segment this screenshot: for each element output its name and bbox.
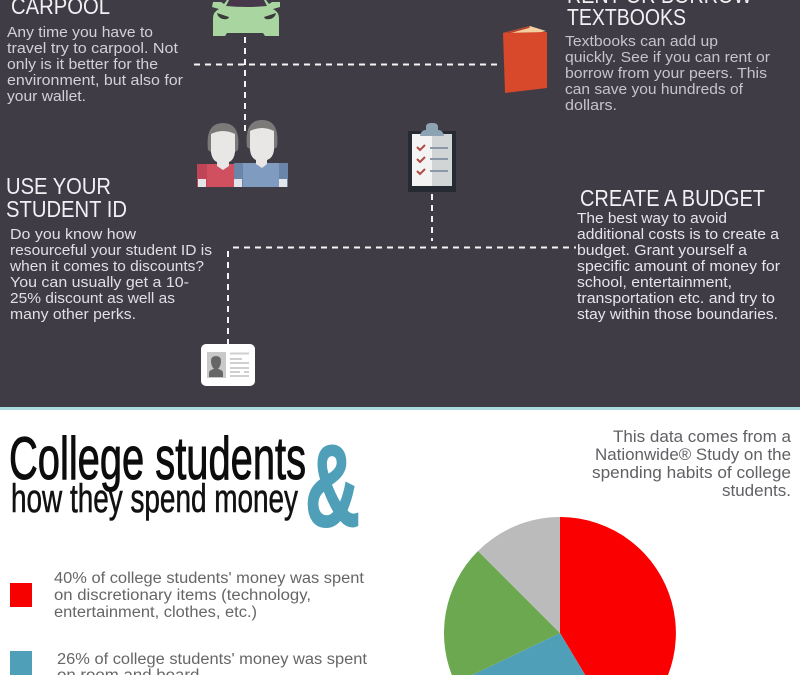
text: budget body: transportation etc. and try to [577,290,775,307]
text: student id body: when it comes to discounts? [9,258,204,275]
text: student id body: resourceful your student ID is [10,242,212,259]
text: data source note: students. [722,481,791,500]
text: data source note: This data comes from a [613,427,792,446]
text: student id body [9,226,212,323]
text: carpool body: travel try to carpool. Not [7,40,179,57]
heading: create a budget: CREATE A BUDGET [580,185,765,211]
legend: discretionary text: entertainment, clothes, etc.) [54,604,257,621]
legend: room and board text: 26% of college students' money was spent [57,651,368,668]
legend: discretionary text: on discretionary items (technology, [54,587,311,604]
text: student id body: 25% discount as well as [10,290,175,307]
text: carpool body: your wallet. [7,88,86,105]
pie chart [444,517,676,675]
legend: red swatch [10,583,32,607]
heading: rent or borrow textbooks [567,0,752,30]
connector: budget vertical dashed line [431,194,433,241]
text: textbooks body: dollars. [565,97,617,114]
heading: use your student id: USE YOUR [6,173,111,199]
text: student id body: Do you know how [10,226,136,243]
text: textbooks body [565,33,770,114]
text: budget body: The best way to avoid [577,210,727,227]
text: textbooks body: borrow from your peers. This [565,65,767,82]
text: student id body: You can usually get a 10- [10,274,189,291]
icon: student id card [201,344,255,386]
text: budget body: school, entertainment, [577,274,732,291]
subtitle: how they spend money: how they spend money [11,477,298,521]
heading: rent or borrow textbooks: TEXTBOOKS [567,4,686,30]
panel: dark tips background [0,0,800,407]
legend: discretionary text [54,570,365,621]
text: carpool body [7,24,183,105]
icon: two students [197,120,288,187]
text: data source note: spending habits of college [592,463,791,482]
connector: carpool vertical dashed line [244,37,246,131]
legend: room and board text [57,651,368,675]
text: student id body: many other perks. [10,306,136,323]
text: textbooks body: quickly. See if you can rent or [565,49,770,66]
text: textbooks body: can save you hundreds of [565,81,744,98]
legend: teal swatch [10,651,32,675]
legend: discretionary text: 40% of college students' money was spent [54,570,365,587]
text: data source note [592,427,792,500]
heading: use your student id: STUDENT ID [6,196,127,222]
text: budget body: additional costs is to create a [577,226,780,243]
title: College students: College students [9,425,306,492]
icon: clipboard checklist [408,123,456,192]
heading: use your student id [6,173,127,222]
text: budget body: stay within those boundaries. [577,306,778,323]
text: budget body [577,210,780,323]
text: carpool body: only is it better for the [7,56,158,73]
icon: car [212,0,280,36]
text: carpool body: Any time you have to [7,24,153,41]
text: data source note: Nationwide® Study on the [595,445,791,464]
text: carpool body: environment, but also for [7,72,183,89]
text: budget body: budget. Grant yourself a [577,242,748,259]
connector: carpool horizontal dashed line [194,64,500,66]
connector: student ID vertical dashed line [227,251,229,345]
text: textbooks body: Textbooks can add up [565,33,718,50]
connector: budget horizontal dashed line [233,246,576,248]
ampersand: & [305,421,360,551]
text: budget body: specific amount of money for [577,258,780,275]
icon: book [503,26,547,93]
